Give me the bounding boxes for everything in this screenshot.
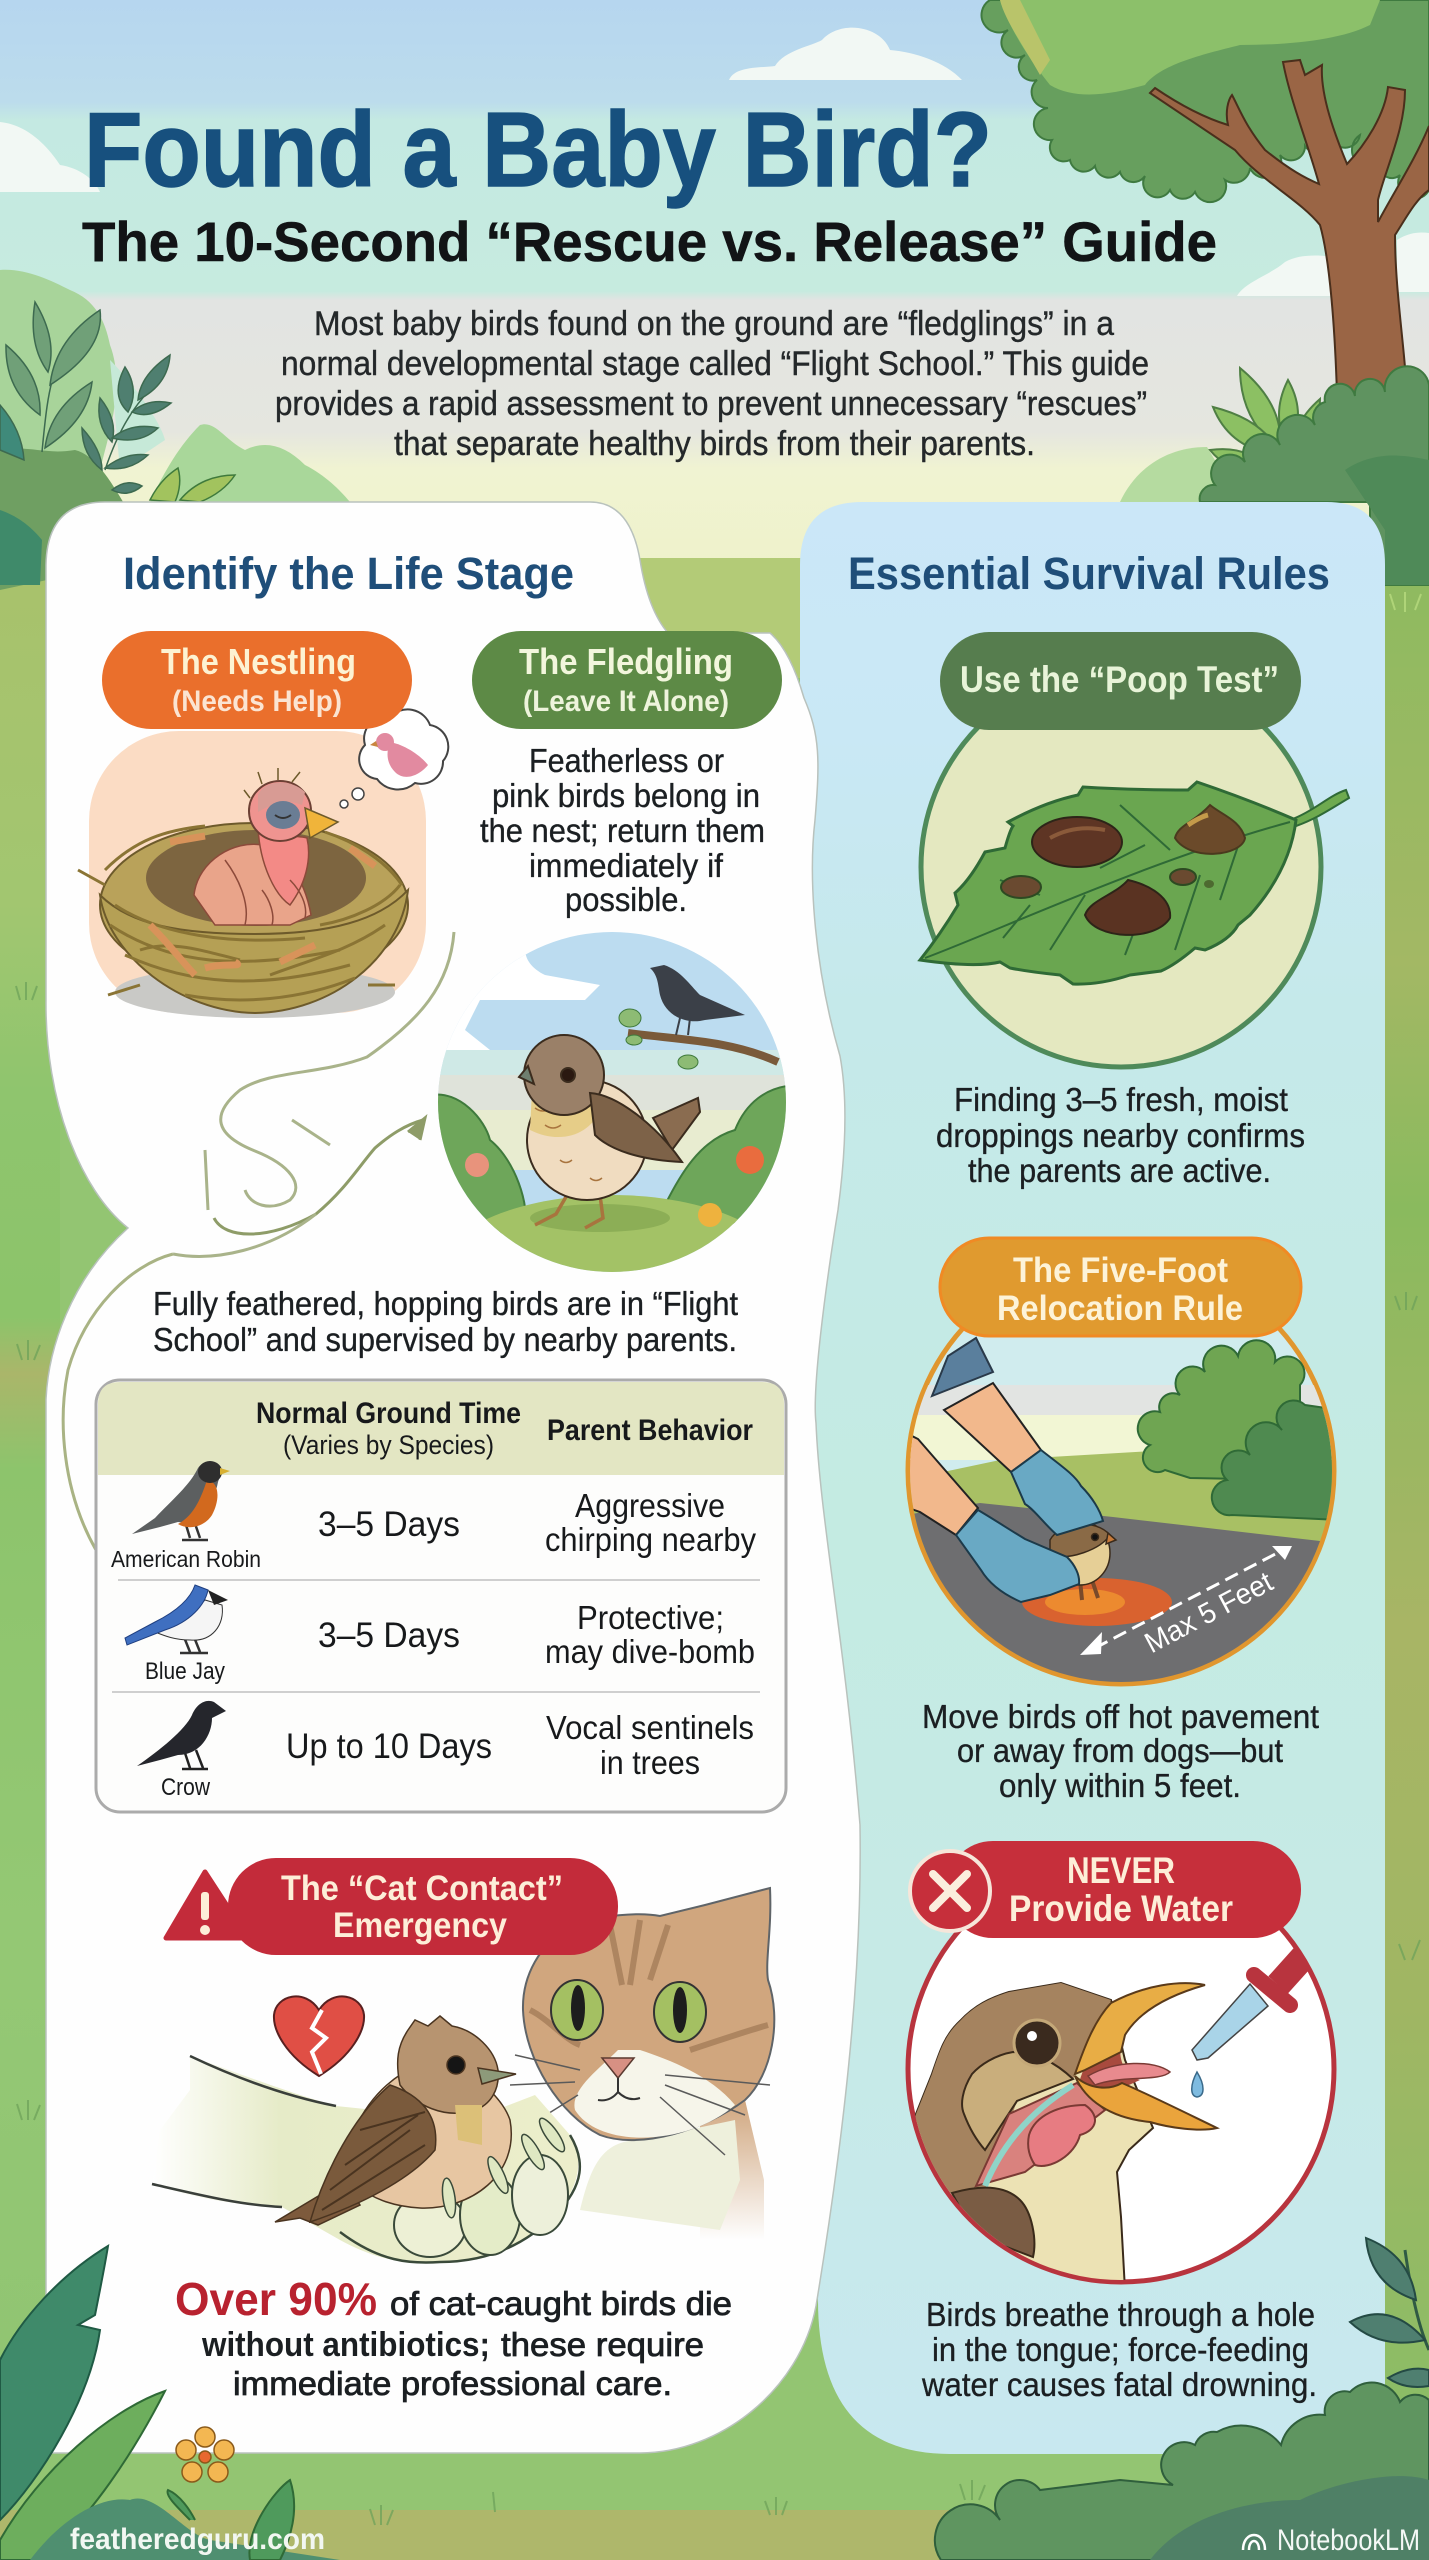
row: blue jay: Protective; — [577, 1599, 724, 1636]
bush — [1138, 1340, 1304, 1480]
row: crow: Crow — [161, 1774, 211, 1801]
heading: essential survival rules: Essential Survival Rules — [848, 548, 1330, 599]
thought bubble — [340, 709, 448, 808]
table header: Parent Behavior — [547, 1414, 753, 1447]
text: water description: in the tongue; force-feeding — [932, 2331, 1309, 2368]
text: water description: Birds breathe through a hole — [926, 2296, 1315, 2333]
row: american robin: Aggressive — [575, 1487, 725, 1524]
arm upper — [944, 1383, 1041, 1472]
row: crow: Up to 10 Days — [286, 1727, 492, 1766]
row: american robin: 3–5 Days — [318, 1505, 460, 1544]
row: blue jay: may dive-bomb — [545, 1633, 755, 1670]
brown fledgling — [519, 1035, 700, 1228]
text: nestling description: possible. — [565, 881, 687, 918]
nestling chick — [194, 768, 338, 925]
arrow: max 5 feet — [1080, 1546, 1292, 1660]
row: american robin: American Robin — [111, 1546, 261, 1572]
subtitle: The 10-Second “Rescue vs. Release” Guide — [82, 210, 1217, 273]
text: nestling description: pink birds belong in — [492, 777, 760, 814]
icon: leaf with droppings — [920, 782, 1349, 984]
plant leaves left — [0, 302, 171, 493]
pill: never provide water: NEVER — [1067, 1850, 1175, 1891]
table header — [256, 1397, 753, 1460]
bird — [1050, 1521, 1116, 1600]
eye — [1014, 2020, 1060, 2066]
claws — [440, 2115, 568, 2219]
icon: broken heart — [274, 1996, 364, 2076]
five-foot illustration — [906, 1328, 1336, 1686]
text: poop test description: the parents are active. — [968, 1152, 1271, 1189]
crow on branch — [650, 965, 745, 1035]
table header: (Varies by Species) — [283, 1430, 494, 1460]
pill: never provide water: Provide Water — [1009, 1888, 1233, 1929]
clouds — [0, 28, 1429, 296]
watermark: featheredguru.com: featheredguru.com — [70, 2523, 325, 2556]
text: cat contact statistic — [175, 2273, 732, 2402]
beak — [1078, 2053, 1140, 2087]
intro text: provides a rapid assessment to prevent unnecessary “rescues” — [275, 385, 1147, 423]
row: blue jay — [125, 1585, 755, 1685]
panel: essential survival rules background — [800, 502, 1385, 2454]
background bushes left — [0, 270, 350, 590]
injured bird — [275, 2016, 516, 2225]
text: fledgling description — [153, 1285, 738, 1358]
arm lower — [910, 1436, 980, 1536]
text: five-foot description: or away from dogs—but — [957, 1732, 1283, 1769]
text: water description — [921, 2296, 1317, 2403]
bottom right foliage — [935, 2238, 1429, 2560]
pill: cat contact emergency: Emergency — [333, 1906, 507, 1945]
panel: identify the life stage background — [46, 502, 860, 2453]
row: blue jay: 3–5 Days — [318, 1616, 460, 1655]
arrow: max 5 feet: Max 5 Feet — [1140, 1566, 1278, 1660]
pill: never provide water — [910, 1841, 1301, 1938]
heading: identify the life stage: Identify the Life Stage — [123, 548, 574, 599]
right bushes — [1120, 368, 1320, 502]
pill: cat contact emergency: The “Cat Contact” — [281, 1869, 563, 1908]
text: cat contact statistic: without antibiotics; — [201, 2326, 490, 2364]
bird head and neck — [905, 1983, 1153, 2290]
pill: the fledgling: The Fledgling — [519, 641, 733, 682]
row: crow — [137, 1701, 754, 1801]
text: cat contact statistic: these require — [501, 2326, 704, 2363]
table header: Normal Ground Time — [256, 1397, 521, 1430]
pill: the nestling: The Nestling — [161, 641, 356, 682]
pill: the fledgling: (Leave It Alone) — [523, 685, 729, 718]
text: nestling description: the nest; return them — [480, 812, 765, 849]
text: nestling description: Featherless or — [529, 742, 724, 779]
text: fledgling description: Fully feathered, hopping birds are in “Flight — [153, 1285, 738, 1322]
road — [914, 1503, 1320, 1682]
pill: cat contact emergency — [166, 1858, 618, 1955]
water illustration — [906, 1927, 1336, 2284]
nestling illustration — [78, 731, 426, 1018]
icon: x mark — [910, 1851, 990, 1931]
dropper — [1192, 1984, 1268, 2060]
curved arrow — [63, 932, 454, 1550]
text: five-foot description — [922, 1698, 1319, 1804]
text: five-foot description: only within 5 feet. — [999, 1767, 1241, 1804]
hand and arm — [152, 2056, 580, 2263]
intro text — [275, 305, 1149, 463]
pill: the nestling — [102, 631, 412, 729]
cat illustration — [510, 1888, 774, 2240]
glove upper — [1011, 1450, 1103, 1535]
pill: the nestling: (Needs Help) — [172, 685, 342, 718]
fledgling illustration — [438, 932, 786, 1272]
row: blue jay: Blue Jay — [145, 1658, 225, 1685]
pill and circle: poop test: Use the “Poop Test” — [960, 659, 1279, 700]
intro text: Most baby birds found on the ground are “fledglings” in a — [314, 305, 1114, 343]
icon: warning triangle — [166, 1872, 248, 1938]
tree — [982, 0, 1429, 585]
text: five-foot description: Move birds off hot pavement — [922, 1698, 1319, 1735]
glove lower — [956, 1510, 1079, 1602]
pill: five-foot relocation rule: The Five-Foot — [1013, 1251, 1228, 1290]
text: poop test description: droppings nearby confirms — [936, 1117, 1305, 1154]
row: crow: Vocal sentinels — [546, 1709, 754, 1746]
text: cat contact statistic: immediate professional care. — [233, 2365, 672, 2402]
text: cat contact statistic: of cat-caught birds die — [390, 2285, 732, 2322]
text: poop test description — [936, 1081, 1305, 1189]
text: nestling description — [480, 742, 765, 918]
text: water description: water causes fatal drowning. — [921, 2366, 1317, 2403]
intro text: that separate healthy birds from their parents. — [394, 425, 1035, 463]
row: american robin: chirping nearby — [545, 1521, 756, 1558]
table: ground time by species — [96, 1380, 786, 1812]
flower — [176, 2427, 234, 2482]
pill: five-foot relocation rule: Relocation Rule — [997, 1289, 1243, 1328]
text: fledgling description: School” and supervised by nearby parents. — [153, 1321, 737, 1358]
title: Found a Baby Bird? — [84, 91, 992, 209]
row: american robin — [111, 1461, 756, 1572]
text: poop test description: Finding 3–5 fresh, moist — [954, 1081, 1288, 1118]
pill: five-foot relocation rule — [940, 1238, 1301, 1336]
row: crow: in trees — [600, 1744, 700, 1781]
intro text: normal developmental stage called “Flight School.” This guide — [281, 345, 1149, 383]
text: cat contact statistic: Over 90% — [175, 2273, 377, 2325]
tongue — [1088, 2063, 1170, 2085]
text: nestling description: immediately if — [529, 847, 724, 884]
bottom left foliage — [0, 2246, 340, 2560]
pill: the fledgling — [472, 631, 782, 729]
pill and circle: poop test — [920, 632, 1349, 1067]
